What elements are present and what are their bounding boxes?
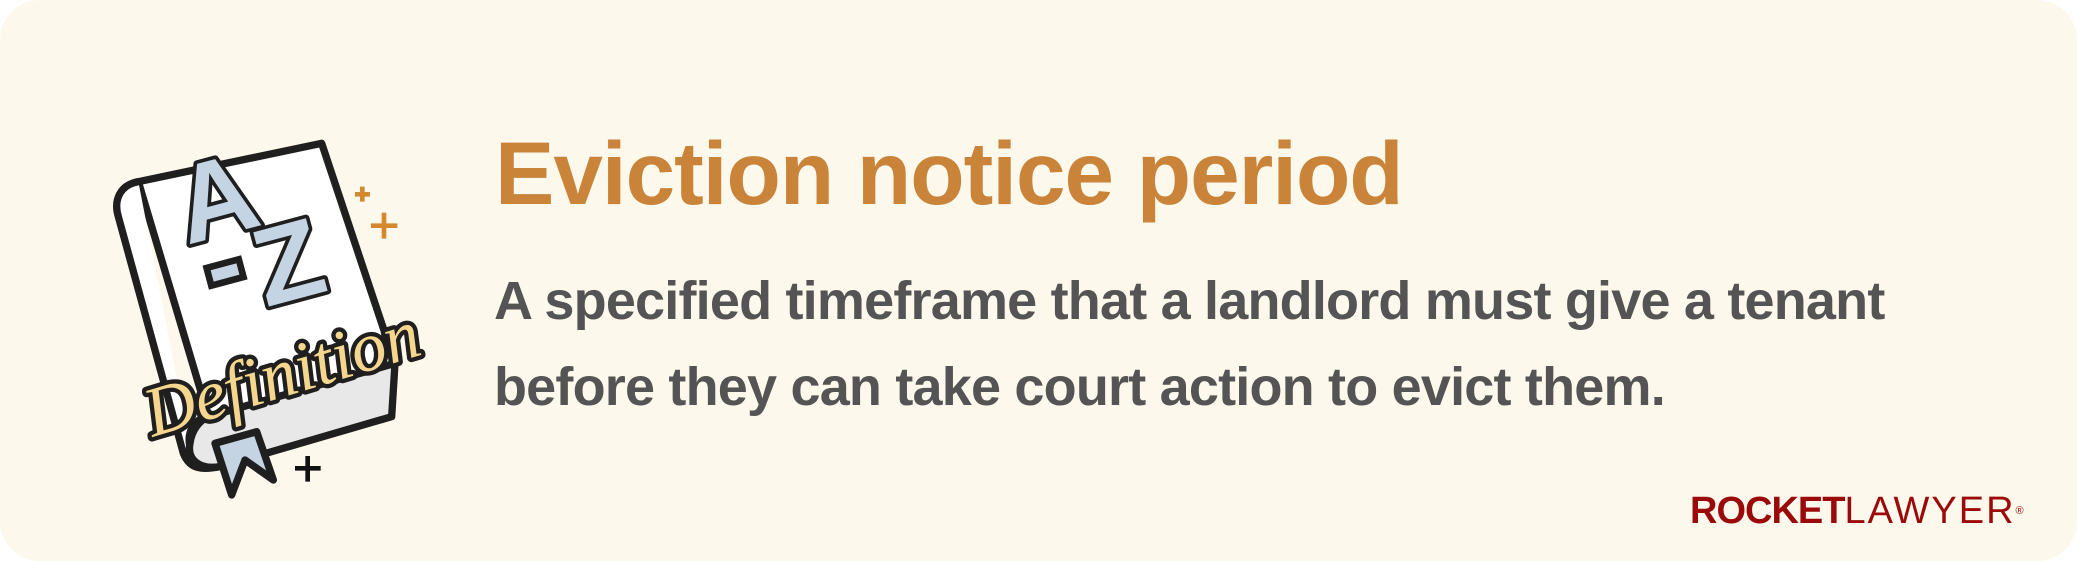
icon: A-Z definition book: Z [240,194,337,331]
text block: definition: before they can take court action to evict them. [494,357,1665,417]
text block: definition: A specified timeframe that a landlord must give a tenant [494,271,1885,331]
logo: Rocket Lawyer: ROCKETLAWYER® [1690,490,2024,532]
text block: definition [494,271,1885,417]
title: Eviction notice period [495,123,1403,223]
icon: A-Z definition book [113,129,429,499]
icon: A-Z definition book: Definition [134,296,429,453]
icon: A-Z definition book: A [162,129,270,268]
